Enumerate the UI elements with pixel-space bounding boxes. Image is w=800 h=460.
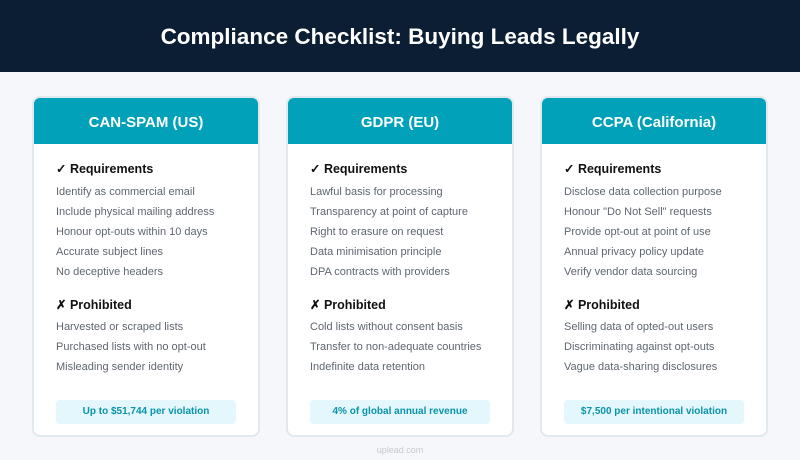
- prohibited list: Discriminating against opt-outs: [564, 341, 714, 353]
- prohibited list: Selling data of opted-out users: [564, 321, 713, 333]
- penalty badge: 4% of global annual revenue: [332, 406, 468, 417]
- footer source: uplead.com: [377, 445, 423, 455]
- requirements heading: ✓ Requirements: [564, 162, 661, 176]
- requirements heading: ✓ Requirements: [310, 162, 407, 176]
- prohibited list: Harvested or scraped lists: [56, 321, 183, 333]
- requirements list: Honour opt-outs within 10 days: [56, 226, 208, 238]
- prohibited list: [310, 321, 481, 373]
- requirements list: Transparency at point of capture: [310, 206, 468, 218]
- prohibited list: Vague data-sharing disclosures: [564, 361, 717, 373]
- prohibited list: Misleading sender identity: [56, 361, 183, 373]
- penalty badge: Up to $51,744 per violation: [83, 406, 209, 417]
- requirements list: [564, 186, 722, 278]
- requirements list: Accurate subject lines: [56, 246, 163, 258]
- prohibited list: Purchased lists with no opt-out: [56, 341, 206, 353]
- panel heading: CAN-SPAM (US): [89, 114, 203, 131]
- penalty badge: [564, 400, 744, 424]
- prohibited list: Cold lists without consent basis: [310, 321, 463, 333]
- requirements list: Data minimisation principle: [310, 246, 441, 258]
- prohibited list: [564, 321, 717, 373]
- requirements list: Provide opt-out at point of use: [564, 226, 711, 238]
- requirements list: Verify vendor data sourcing: [564, 266, 697, 278]
- prohibited list: Indefinite data retention: [310, 361, 425, 373]
- requirements heading: ✓ Requirements: [56, 162, 153, 176]
- requirements list: Annual privacy policy update: [564, 246, 704, 258]
- panel heading: CCPA (California): [592, 114, 716, 131]
- prohibited heading: ✗ Prohibited: [564, 298, 640, 312]
- requirements list: Lawful basis for processing: [310, 186, 443, 198]
- title: [0, 0, 800, 72]
- panel heading: GDPR (EU): [361, 114, 439, 131]
- requirements list: Right to erasure on request: [310, 226, 443, 238]
- prohibited heading: ✗ Prohibited: [310, 298, 386, 312]
- requirements list: Honour "Do Not Sell" requests: [564, 206, 712, 218]
- requirements list: Include physical mailing address: [56, 206, 214, 218]
- requirements list: Disclose data collection purpose: [564, 186, 722, 198]
- requirements list: [310, 186, 468, 278]
- panel heading: [286, 96, 514, 144]
- prohibited list: [56, 321, 206, 373]
- penalty badge: [56, 400, 236, 424]
- prohibited list: Transfer to non-adequate countries: [310, 341, 481, 353]
- requirements list: Identify as commercial email: [56, 186, 195, 198]
- requirements list: DPA contracts with providers: [310, 266, 450, 278]
- requirements list: No deceptive headers: [56, 266, 163, 278]
- requirements list: [56, 186, 214, 278]
- panel heading: [540, 96, 768, 144]
- panel: CCPA: [540, 96, 768, 437]
- penalty badge: [310, 400, 490, 424]
- penalty badge: $7,500 per intentional violation: [581, 406, 727, 417]
- panel: GDPR: [286, 96, 514, 437]
- title: Compliance Checklist: Buying Leads Legally: [161, 24, 639, 49]
- prohibited heading: ✗ Prohibited: [56, 298, 132, 312]
- panel: CAN-SPAM: [32, 96, 260, 437]
- panel heading: [32, 96, 260, 144]
